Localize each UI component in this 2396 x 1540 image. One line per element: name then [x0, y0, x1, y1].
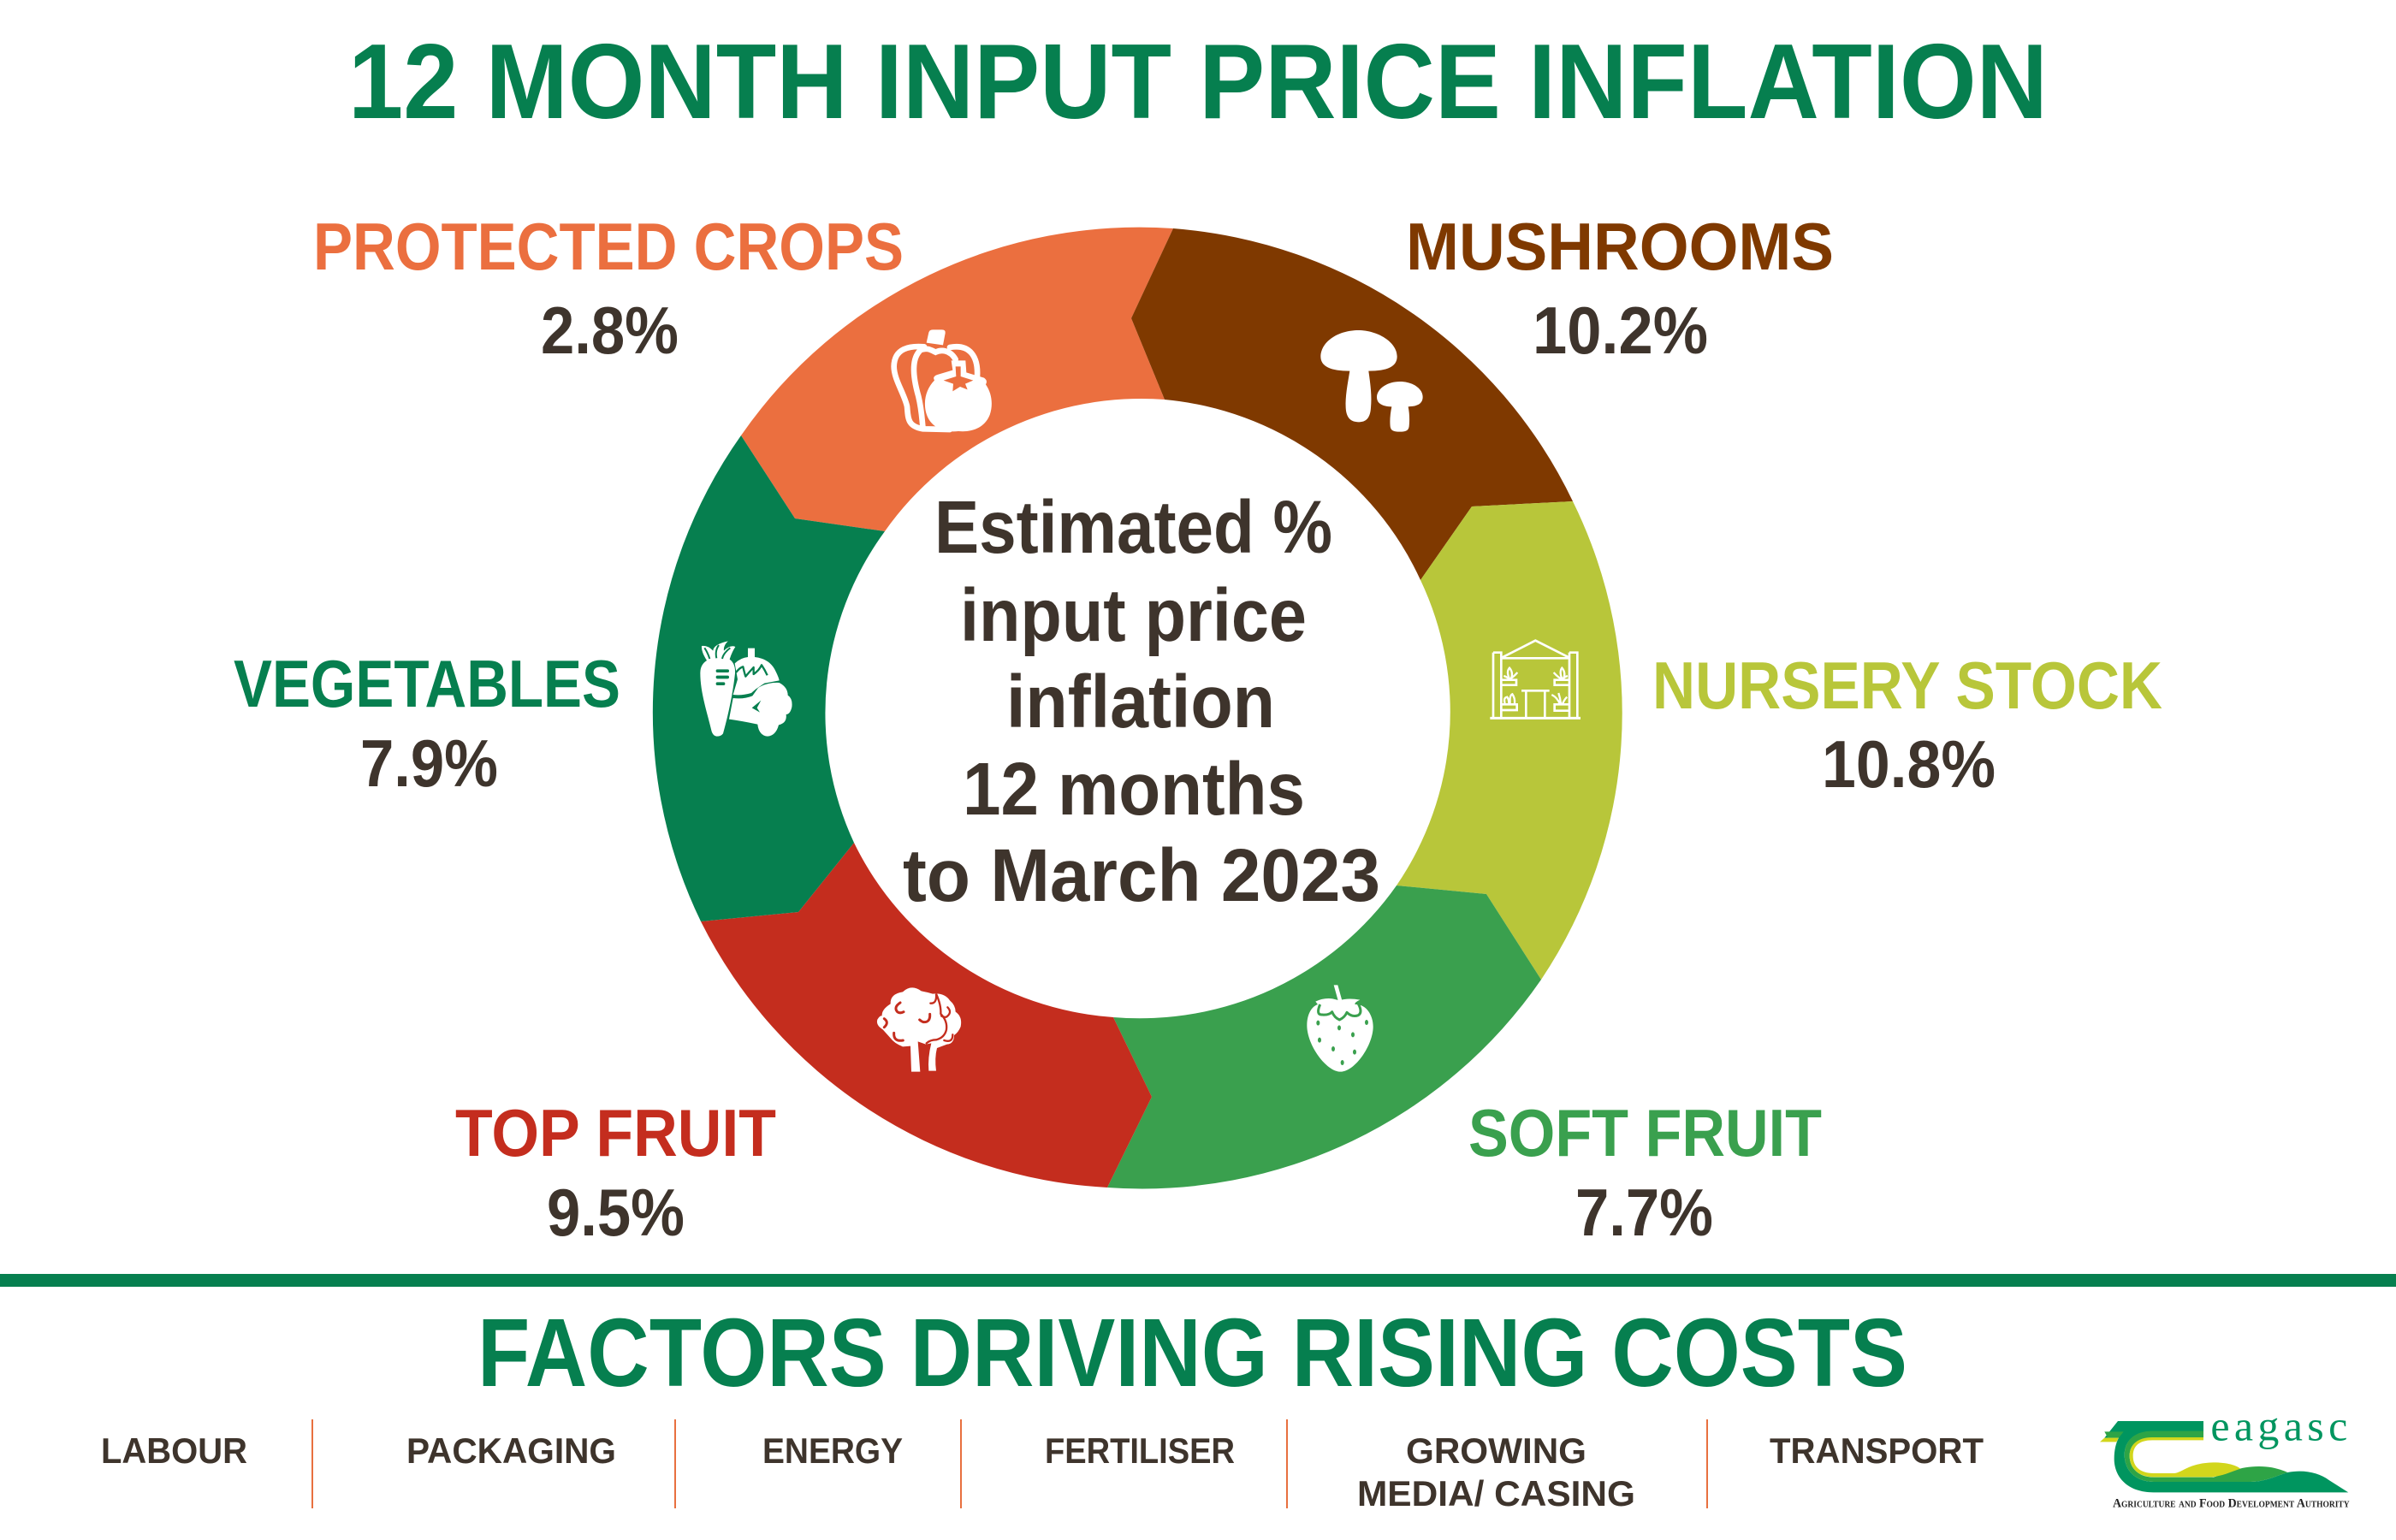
centre text: inflation	[1006, 660, 1275, 743]
icon: nursery greenhouse	[1490, 641, 1581, 718]
label: top fruit: TOP FRUIT	[455, 1095, 776, 1170]
icon: vegetables	[700, 641, 792, 737]
label: soft fruit: SOFT FRUIT	[1468, 1095, 1822, 1170]
factors list: TRANSPORT	[1770, 1430, 1984, 1471]
centre text: 12 months	[963, 748, 1305, 831]
factors list: GROWING	[1406, 1430, 1586, 1471]
label: protected crops	[313, 209, 904, 368]
logo: teagasc	[2100, 1401, 2350, 1511]
label: mushrooms: MUSHROOMS	[1406, 209, 1834, 284]
label: vegetables: 7.9%	[360, 726, 498, 801]
factors list: PACKAGING	[406, 1430, 616, 1471]
factors list	[101, 1419, 1984, 1513]
segment: nursery stock	[1397, 501, 1622, 980]
label: vegetables	[234, 646, 620, 801]
label: top fruit	[455, 1095, 776, 1250]
segment: mushrooms	[1131, 228, 1573, 580]
icon: pepper and tomato	[894, 329, 992, 431]
segment: vegetables	[653, 435, 885, 921]
label: soft fruit: 7.7%	[1575, 1175, 1713, 1250]
centre text: Estimated %	[934, 486, 1332, 569]
logo: teagasc: Agriculture and Food Development Authority	[2113, 1497, 2350, 1511]
label: nursery stock	[1652, 648, 2162, 802]
label: soft fruit	[1468, 1095, 1822, 1250]
icon: mushrooms	[1320, 330, 1423, 432]
label: vegetables: VEGETABLES	[234, 646, 620, 721]
donut chart	[653, 228, 1622, 1188]
label: nursery stock: 10.8%	[1822, 726, 1996, 802]
factors list: ENERGY	[762, 1430, 903, 1471]
centre text: input price	[960, 574, 1307, 657]
label: top fruit: 9.5%	[547, 1175, 685, 1250]
label: nursery stock: NURSERY STOCK	[1652, 648, 2162, 723]
factors list: MEDIA/ CASING	[1357, 1473, 1635, 1513]
logo: teagasc: eagasc	[2210, 1401, 2347, 1449]
heading: factors: FACTORS DRIVING RISING COSTS	[477, 1299, 1907, 1407]
label: mushrooms	[1406, 209, 1834, 368]
centre text: to March 2023	[903, 834, 1380, 917]
label: protected crops: PROTECTED CROPS	[313, 209, 904, 284]
factors list: FERTILISER	[1045, 1430, 1235, 1471]
icon: strawberry	[1307, 985, 1373, 1072]
segment: top fruit	[701, 843, 1152, 1188]
title: 12 MONTH INPUT PRICE INFLATION	[348, 23, 2048, 141]
centre text	[903, 486, 1380, 917]
factors list: LABOUR	[101, 1430, 247, 1471]
label: mushrooms: 10.2%	[1533, 293, 1708, 368]
segment: protected crops	[741, 228, 1173, 531]
label: protected crops: 2.8%	[541, 293, 679, 368]
segment: soft fruit	[1107, 886, 1541, 1188]
icon: tree	[877, 987, 961, 1072]
